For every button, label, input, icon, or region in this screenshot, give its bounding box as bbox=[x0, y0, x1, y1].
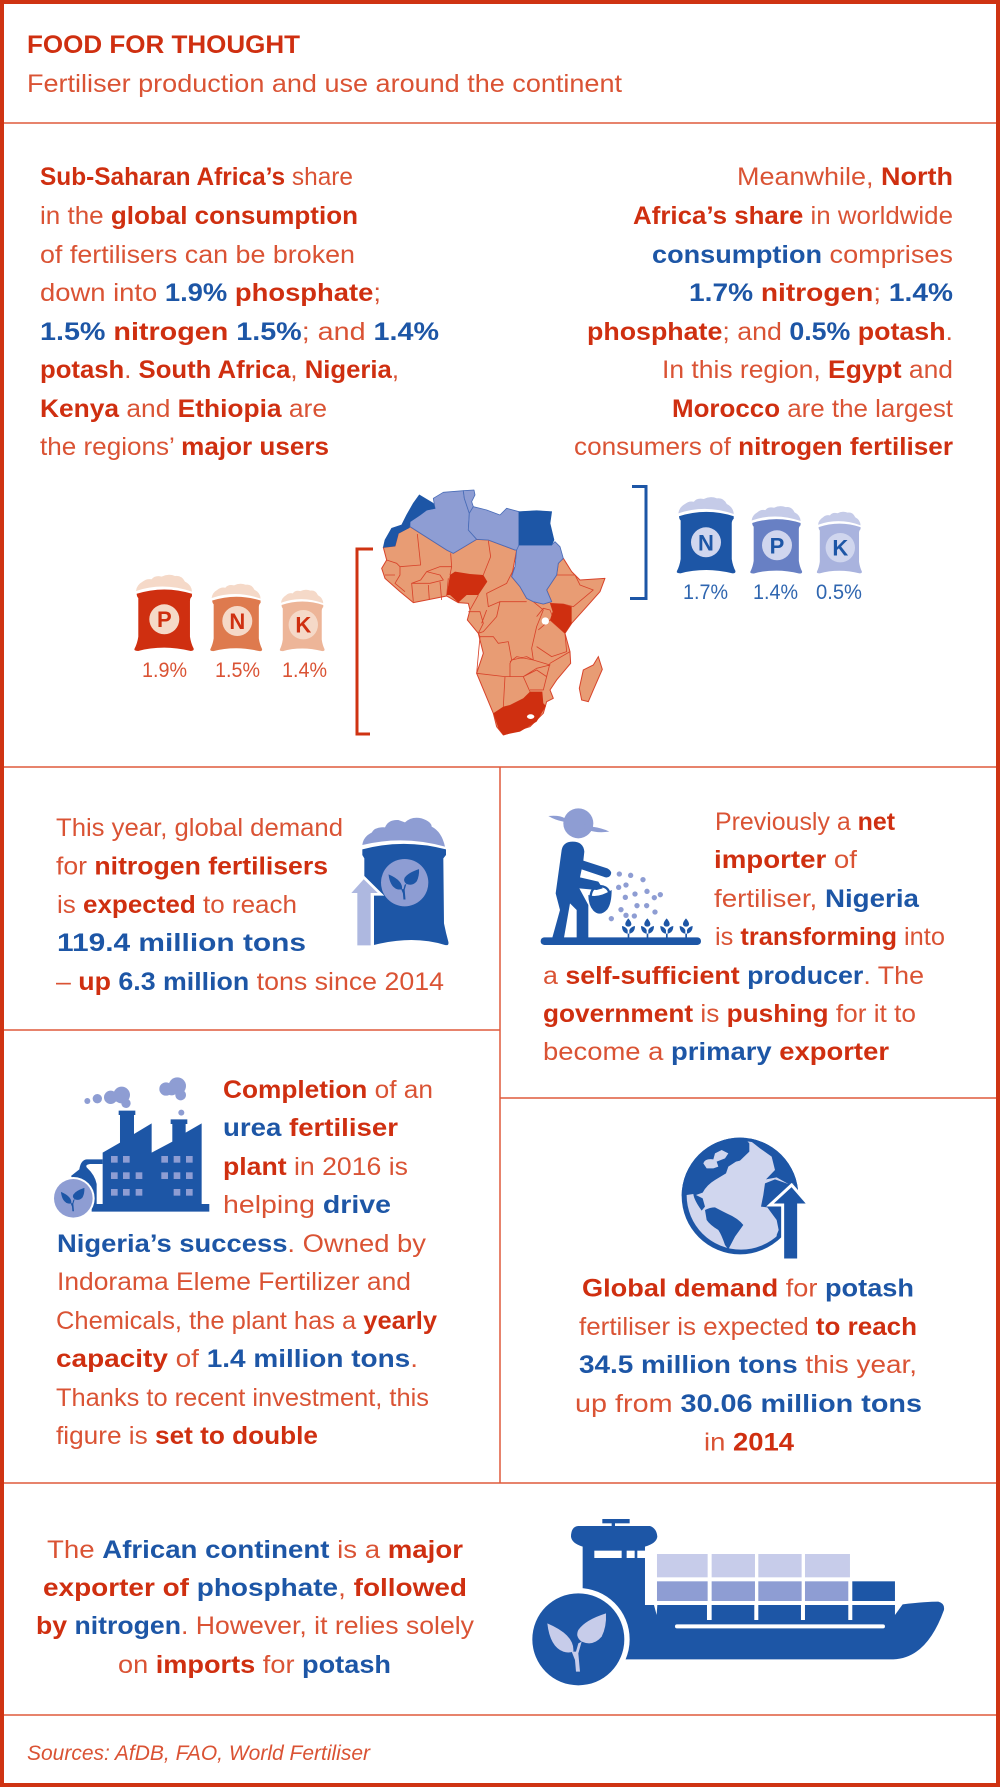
Nigeria, Kenya, South Africa bbox=[447, 572, 487, 603]
bracket: north bbox=[630, 486, 646, 598]
text block: nitrogen demand: This year, global demand bbox=[56, 814, 343, 842]
sub-Saharan Africa bbox=[382, 527, 605, 735]
text block: sub-Saharan Africa: down into 1.9% phosphate ; bbox=[40, 279, 381, 307]
text block: urea plant bbox=[56, 1076, 437, 1450]
country borders bbox=[385, 534, 593, 707]
text block: urea plant: Thanks to recent investment, this bbox=[56, 1384, 429, 1412]
icon: globe with arrow bbox=[682, 1138, 806, 1258]
text block: North Africa: Morocco are the largest bbox=[672, 395, 953, 423]
text block: North Africa: In this region, Egypt and bbox=[662, 356, 953, 384]
text block: urea plant: plant in 2016 is bbox=[223, 1153, 408, 1181]
text block: nitrogen demand bbox=[56, 814, 444, 996]
sack: phosphate blue: 1.4% bbox=[753, 581, 798, 604]
sack: potash blue bbox=[816, 512, 862, 604]
text block: Nigeria importer: a self-sufficient producer . The bbox=[543, 962, 924, 990]
sack: potash blue: 0.5% bbox=[816, 581, 862, 604]
text block: sub-Saharan Africa: 1.5% nitrogen 1.5% ; and 1.4% bbox=[40, 318, 439, 346]
text block: North Africa: consumption comprises bbox=[652, 241, 953, 269]
title bbox=[27, 31, 622, 98]
text block: urea plant: figure is set to double bbox=[56, 1422, 318, 1450]
text block: Nigeria importer: is transforming into bbox=[715, 923, 945, 951]
text block: exporter: on imports for potash bbox=[118, 1651, 391, 1679]
sack: nitrogen red: 1.5% bbox=[215, 659, 260, 682]
bracket: sub-Saharan bbox=[357, 549, 373, 734]
sack: potash red bbox=[279, 590, 327, 682]
text block: urea plant: Indorama Eleme Fertilizer and bbox=[57, 1268, 411, 1296]
sack: phosphate blue bbox=[750, 506, 803, 604]
sack: nitrogen blue: N bbox=[698, 530, 714, 555]
title: FOOD FOR THOUGHT bbox=[27, 31, 300, 59]
text block: potash demand: in 2014 bbox=[704, 1428, 794, 1456]
icon: container ship bbox=[527, 1519, 944, 1691]
icon: factory bbox=[52, 1077, 209, 1220]
text block: sub-Saharan Africa: the regions’ major users bbox=[40, 433, 329, 461]
text block: exporter: The African continent is a major bbox=[47, 1536, 463, 1564]
text block: urea plant: helping drive bbox=[223, 1191, 391, 1219]
icon: farmer sowing bbox=[541, 808, 701, 945]
text block: sub-Saharan Africa: in the global consumption bbox=[40, 202, 358, 230]
sack: nitrogen red bbox=[210, 584, 263, 682]
title: Fertiliser production and use around the continent bbox=[27, 70, 622, 98]
sack: phosphate red: 1.9% bbox=[142, 659, 187, 682]
text block: nitrogen demand: – up 6.3 million tons since 2014 bbox=[56, 968, 444, 996]
text block: potash demand: 34.5 million tons this year, bbox=[579, 1351, 917, 1379]
text block: exporter bbox=[36, 1536, 475, 1679]
text block: urea plant: Nigeria’s success . Owned by bbox=[57, 1230, 427, 1258]
North Africa bbox=[410, 491, 477, 553]
text block: sub-Saharan Africa: Kenya and Ethiopia are bbox=[40, 395, 327, 423]
text block: potash demand: up from 30.06 million tons bbox=[575, 1390, 922, 1418]
Madagascar bbox=[579, 657, 602, 702]
sack: phosphate blue: P bbox=[770, 533, 784, 558]
text block: Nigeria importer: importer of bbox=[714, 846, 857, 874]
text block: Nigeria importer bbox=[543, 808, 945, 1066]
text block: urea plant: Completion of an bbox=[223, 1076, 433, 1104]
sack: potash red: K bbox=[295, 612, 311, 638]
sack: potash blue: K bbox=[832, 536, 848, 560]
text block: potash demand bbox=[575, 1274, 922, 1456]
text block: nitrogen demand: for nitrogen fertilisers bbox=[56, 852, 328, 880]
sack: nitrogen red: N bbox=[229, 609, 245, 634]
text block: sub-Saharan Africa: of fertilisers can be broken bbox=[40, 241, 355, 269]
text block: North Africa: phosphate ; and 0.5% potash. bbox=[587, 318, 953, 346]
text block: nitrogen demand: 119.4 million tons bbox=[57, 929, 306, 957]
text block: North Africa bbox=[574, 163, 953, 461]
text block: urea plant: Chemicals, the plant has a yearly bbox=[56, 1307, 437, 1335]
text block: nitrogen demand: is expected to reach bbox=[57, 891, 297, 919]
text block: North Africa: Africa’s share in worldwide bbox=[633, 202, 953, 230]
text block: North Africa: consumers of nitrogen fertiliser bbox=[574, 433, 953, 461]
text block: sub-Saharan Africa bbox=[40, 163, 439, 461]
sack: phosphate red: P bbox=[157, 607, 172, 632]
icon: fertiliser bag with arrow bbox=[348, 818, 449, 947]
text block: exporter: by nitrogen . However, it relies solely bbox=[36, 1612, 475, 1640]
sack: nitrogen blue: 1.7% bbox=[683, 581, 728, 604]
sack: potash red: 1.4% bbox=[282, 659, 327, 682]
text block: Nigeria importer: Previously a net bbox=[715, 808, 896, 836]
sources: Sources: AfDB, FAO, World Fertiliser bbox=[27, 1742, 371, 1765]
map of Africa bbox=[382, 490, 605, 735]
text block: urea plant: urea fertiliser bbox=[223, 1114, 398, 1142]
text block: Nigeria importer: become a primary exporter bbox=[543, 1038, 889, 1066]
text block: North Africa: Meanwhile, North bbox=[737, 163, 953, 191]
text block: North Africa: 1.7% nitrogen ; 1.4% bbox=[689, 279, 953, 307]
text block: sub-Saharan Africa: potash. South Africa, Nigeria, bbox=[40, 356, 399, 384]
text block: Nigeria importer: fertiliser, Nigeria bbox=[714, 885, 920, 913]
text block: Nigeria importer: government is pushing for it to bbox=[543, 1000, 916, 1028]
text block: urea plant: capacity of 1.4 million tons . bbox=[56, 1345, 418, 1373]
text block: exporter: exporter of phosphate , followed bbox=[43, 1574, 467, 1602]
text block: potash demand: fertiliser is expected to reach bbox=[579, 1313, 917, 1341]
sack: nitrogen blue bbox=[676, 497, 736, 604]
text block: sub-Saharan Africa: Sub-Saharan Africa’s share bbox=[40, 163, 353, 191]
text block: potash demand: Global demand for potash bbox=[582, 1274, 914, 1302]
sack: phosphate red bbox=[134, 575, 194, 682]
Egypt and Morocco bbox=[519, 511, 554, 545]
